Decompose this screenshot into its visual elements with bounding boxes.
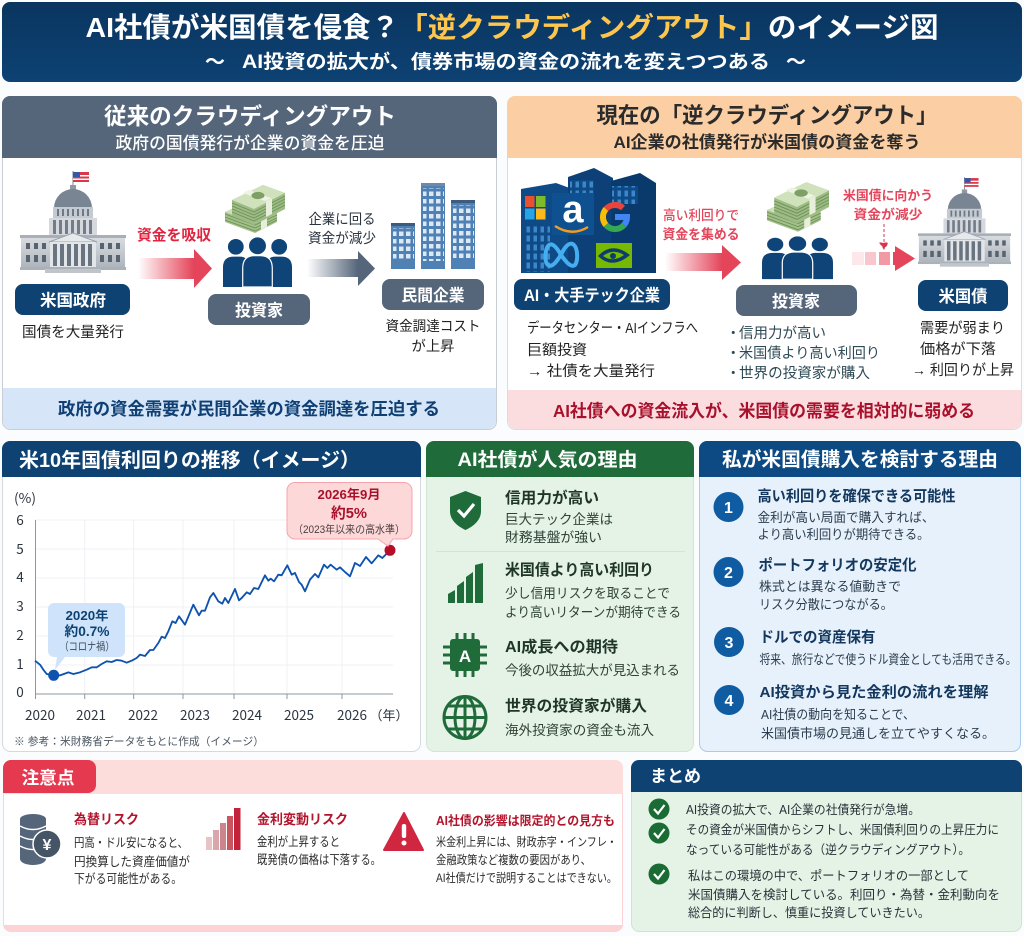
y axis labels: 5	[16, 538, 24, 558]
label: collect funds: 高い利回りで	[663, 207, 739, 223]
x axis labels: 2023	[180, 704, 210, 724]
callout: 2026: 約5%	[331, 505, 367, 522]
summary text: 米国債購入を検討している。利回り・為替・金利動向を	[688, 887, 1000, 902]
text: financing cost rises	[386, 318, 480, 354]
panel: yield chart	[2, 441, 421, 752]
item: fx risk: 円高・ドル安になると、	[74, 835, 188, 850]
summary text	[686, 802, 1000, 920]
arrow: red	[138, 249, 212, 288]
x axis labels: （年）	[369, 705, 409, 724]
callout: 2020: 約0.7%	[64, 623, 110, 639]
text: treasuries description	[912, 320, 1014, 379]
title banner	[2, 2, 1022, 82]
list: investor reasons: 米国債より高い利回り	[739, 345, 880, 362]
subtitle: 〜	[786, 52, 806, 73]
check icons	[648, 798, 670, 884]
list: investor reasons: 世界の投資家が購入	[739, 365, 871, 382]
label: investors	[208, 294, 310, 325]
text: tech description: 巨額投資	[527, 342, 587, 359]
heading: 私が米国債購入を検討する理由	[722, 448, 998, 471]
list: investor reasons: ・	[726, 326, 740, 342]
y axis labels: 2	[16, 624, 24, 644]
label: US government: 米国政府	[40, 291, 106, 310]
list: investor reasons	[726, 325, 880, 382]
panel: reverse crowding out	[507, 96, 1022, 430]
item: AI growth: AI成長への期待	[505, 637, 619, 656]
reason 2	[714, 556, 916, 612]
list: investor reasons: ・	[726, 346, 740, 362]
reason 3: 3	[725, 635, 734, 652]
item: credit	[450, 488, 613, 545]
panel: conventional crowding out	[2, 96, 497, 430]
item: global investors	[444, 696, 655, 739]
reason 1: 高い利回りを確保できる可能性	[758, 487, 956, 505]
item: global investors: 海外投資家の資金も流入	[505, 723, 655, 738]
callout: 2020	[48, 603, 125, 670]
item: yield: より高いリターンが期待できる	[505, 604, 681, 620]
subheading: 政府の国債発行が企業の資金を圧迫	[116, 133, 384, 153]
summary text: 総合的に判断し、慎重に投資していきたい。	[688, 905, 930, 920]
heading tab	[3, 760, 96, 793]
icon: chip: A	[459, 647, 471, 666]
item: credit: 巨大テック企業は	[505, 512, 613, 527]
x axis labels: 2024	[232, 704, 262, 724]
item: yield: 米国債より高い利回り	[505, 561, 654, 579]
heading: AI社債が人気の理由	[458, 448, 638, 471]
icon: investors	[762, 236, 833, 279]
icon: money	[225, 185, 285, 233]
icon: signal bars	[448, 563, 483, 603]
item: rate risk: 金利変動リスク	[257, 811, 348, 827]
text: tech description	[527, 319, 698, 380]
icon: coins and yen: ¥	[43, 837, 52, 854]
y axis labels: 4	[16, 566, 24, 586]
subtitle: 〜	[205, 52, 225, 73]
item: fx risk: 円換算した資産価値が	[74, 854, 190, 869]
text: financing cost rises: 資金調達コスト	[386, 318, 480, 334]
reason 2: 2	[724, 565, 733, 582]
icon: capitol	[20, 171, 126, 273]
item: yield: 少し信用リスクを取ることで	[505, 586, 670, 601]
logo: a with smile: a	[562, 189, 584, 231]
label: private companies	[382, 279, 484, 310]
reason 4: 米国債市場の見通しを立てやすくなる。	[761, 726, 995, 741]
y axis labels: 0	[16, 681, 24, 701]
item: global investors: 世界の投資家が購入	[505, 696, 647, 715]
item: rate risk	[206, 808, 381, 867]
icon: rising bars	[206, 808, 240, 850]
x axis labels: 2020	[25, 704, 55, 724]
item: yield	[448, 561, 681, 620]
reason 4: AI社債の動向を知ることで、	[761, 707, 915, 722]
item: limited impact view	[384, 813, 617, 885]
label: absorb funds: 資金を吸収	[137, 226, 211, 244]
label: less money to treasuries	[843, 188, 933, 222]
summary text: AI投資の拡大で、AI企業の社債発行が急増。	[686, 802, 920, 817]
y axis labels: (%)	[14, 487, 36, 507]
label: collect funds	[662, 207, 740, 242]
icon: tech company logos on towers	[521, 168, 656, 273]
callout: 2020: 2020年	[66, 608, 108, 623]
list: investor reasons: ・	[726, 366, 740, 382]
text: mass issuance: 国債を大量発行	[22, 324, 124, 341]
reason 2: リスク分散につながる。	[759, 597, 893, 612]
footer: conclusion: 政府の資金需要が民間企業の資金調達を圧迫する	[58, 399, 440, 419]
item: rate risk: 既発債の価格は下落する。	[257, 852, 381, 867]
reason 4: 4	[725, 693, 734, 710]
text: treasuries description: 需要が弱まり	[920, 320, 1005, 337]
icon: investors	[223, 237, 292, 287]
reason 4: AI投資から見た金利の流れを理解	[760, 683, 988, 701]
item: fx risk	[20, 811, 190, 886]
item: credit: 財務基盤が強い	[505, 529, 602, 545]
item: credit: 信用力が高い	[505, 488, 599, 507]
logo: G	[603, 205, 627, 229]
arrow: gray	[307, 251, 375, 286]
footer: conclusion: AI社債への資金流入が、米国債の需要を相対的に弱める	[553, 401, 975, 421]
label: reduced funds to companies: 資金が減少	[308, 230, 376, 246]
x axis labels: 2025	[284, 704, 314, 724]
icon: money	[767, 182, 829, 232]
subheading: AI企業の社債発行が米国債の資金を奪う	[614, 132, 920, 152]
y axis labels	[14, 487, 36, 701]
item: fx risk: 為替リスク	[74, 811, 139, 827]
callout: 2026: 2026年9月	[318, 487, 380, 502]
item: rate risk: 金利が上昇すると	[257, 834, 340, 849]
panel: cautions	[3, 760, 623, 932]
label: AI and big tech: AI・大手テック企業	[524, 285, 660, 305]
item: limited impact view: AI社債だけで説明することはできない。	[436, 870, 617, 885]
y axis labels: 3	[16, 595, 24, 615]
icon: warning triangle	[384, 813, 423, 850]
reason 1	[714, 487, 956, 542]
label: reduced funds to companies	[308, 211, 376, 246]
heading: 従来のクラウディングアウト	[104, 103, 396, 129]
reason 1: 1	[724, 500, 733, 517]
label: US government	[15, 284, 130, 315]
label: collect funds: 資金を集める	[662, 226, 740, 242]
item: AI growth	[443, 633, 680, 678]
logo: windows squares	[525, 196, 546, 220]
item: limited impact view: AI社債の影響は限定的との見方も	[436, 813, 615, 828]
icon: globe	[444, 696, 486, 739]
y axis labels: 6	[16, 509, 24, 529]
panel: why I consider US treasuries	[699, 441, 1021, 752]
heading: 現在の「逆クラウディングアウト」	[596, 103, 938, 128]
icon: chip	[443, 633, 487, 677]
icon: capitol	[918, 177, 1011, 267]
reason 2: ポートフォリオの安定化	[758, 556, 916, 574]
label: investors: 投資家	[772, 291, 820, 311]
label: less money to treasuries: 資金が減少	[854, 207, 922, 222]
reason 3	[714, 627, 1016, 667]
arrow: red	[665, 245, 741, 280]
callout: 2026	[287, 482, 412, 546]
list: investor reasons: 信用力が高い	[739, 325, 826, 342]
icon: office buildings	[391, 183, 475, 269]
item: limited impact view: 金融政策など複数の要因があり、	[436, 852, 591, 867]
heading tab: 注意点	[22, 768, 74, 788]
x axis labels	[25, 704, 409, 724]
title: AI社債が米国債を侵食？「逆クラウディングアウト」のイメージ図	[86, 11, 938, 43]
footnote: ※ 参考：米財務省データをもとに作成（イメージ）	[14, 734, 264, 748]
label: treasuries	[918, 280, 1008, 311]
callout: 2020: （コロナ禍）	[60, 639, 114, 653]
reason 2: 株式とは異なる値動きで	[759, 579, 901, 594]
footer: conclusion	[3, 388, 496, 429]
reason 1: より高い利回りが期待できる。	[758, 527, 930, 542]
label: AI and big tech	[514, 279, 670, 310]
line chart	[14, 487, 409, 724]
panel: why AI bonds are popular	[426, 441, 694, 752]
reason 4	[714, 683, 995, 741]
subtitle: AI投資の拡大が、債券市場の資金の流れを変えつつある	[242, 50, 770, 73]
point: 2020 low	[48, 670, 59, 681]
reason 1: 金利が高い局面で購入すれば、	[758, 510, 934, 525]
x axis labels: 2022	[128, 704, 158, 724]
point: 2026 high	[384, 545, 396, 556]
text: treasuries description: 価格が下落	[920, 341, 997, 358]
logo: eye	[596, 243, 632, 268]
icon: coins and yen	[20, 814, 61, 865]
label: private companies: 民間企業	[402, 285, 465, 305]
summary text: その資金が米国債からシフトし、米国債利回りの上昇圧力に	[686, 822, 999, 837]
x axis labels: 2021	[76, 704, 106, 724]
reason 3: ドルでの資産保有	[760, 628, 876, 646]
x axis labels: 2026	[337, 704, 367, 724]
footer: conclusion	[508, 390, 1021, 429]
heading: 米10年国債利回りの推移（イメージ）	[19, 449, 360, 472]
text: tech description: → 社債を大量発行	[527, 363, 655, 380]
summary text: 私はこの環境の中で、ポートフォリオの一部として	[688, 868, 969, 883]
label: treasuries: 米国債	[938, 287, 988, 306]
yield line	[35, 550, 390, 675]
label: reduced funds to companies: 企業に回る	[308, 211, 376, 227]
text: treasuries description: → 利回りが上昇	[912, 362, 1014, 379]
icon: shield	[450, 491, 481, 530]
logo: infinity	[545, 244, 577, 266]
text: financing cost rises: が上昇	[412, 338, 454, 354]
summary text: なっている可能性がある（逆クラウディングアウト）。	[686, 842, 970, 857]
text: tech description: データセンター・AIインフラへ	[527, 319, 698, 337]
arrow: dashed down	[880, 224, 888, 249]
item: fx risk: 下がる可能性がある。	[74, 871, 182, 886]
callout: 2026: （2023年以来の高水準）	[293, 522, 405, 536]
item: limited impact view: 米金利上昇には、財政赤字・インフレ・	[436, 834, 617, 849]
item: AI growth: 今後の収益拡大が見込まれる	[505, 663, 680, 678]
heading: まとめ	[650, 767, 701, 786]
label: less money to treasuries: 米国債に向かう	[843, 188, 933, 203]
arrow: fading segmented	[852, 246, 915, 271]
label: investors	[736, 285, 857, 316]
y axis labels: 1	[16, 653, 24, 673]
label: investors: 投資家	[235, 300, 283, 320]
panel: summary	[631, 760, 1022, 932]
